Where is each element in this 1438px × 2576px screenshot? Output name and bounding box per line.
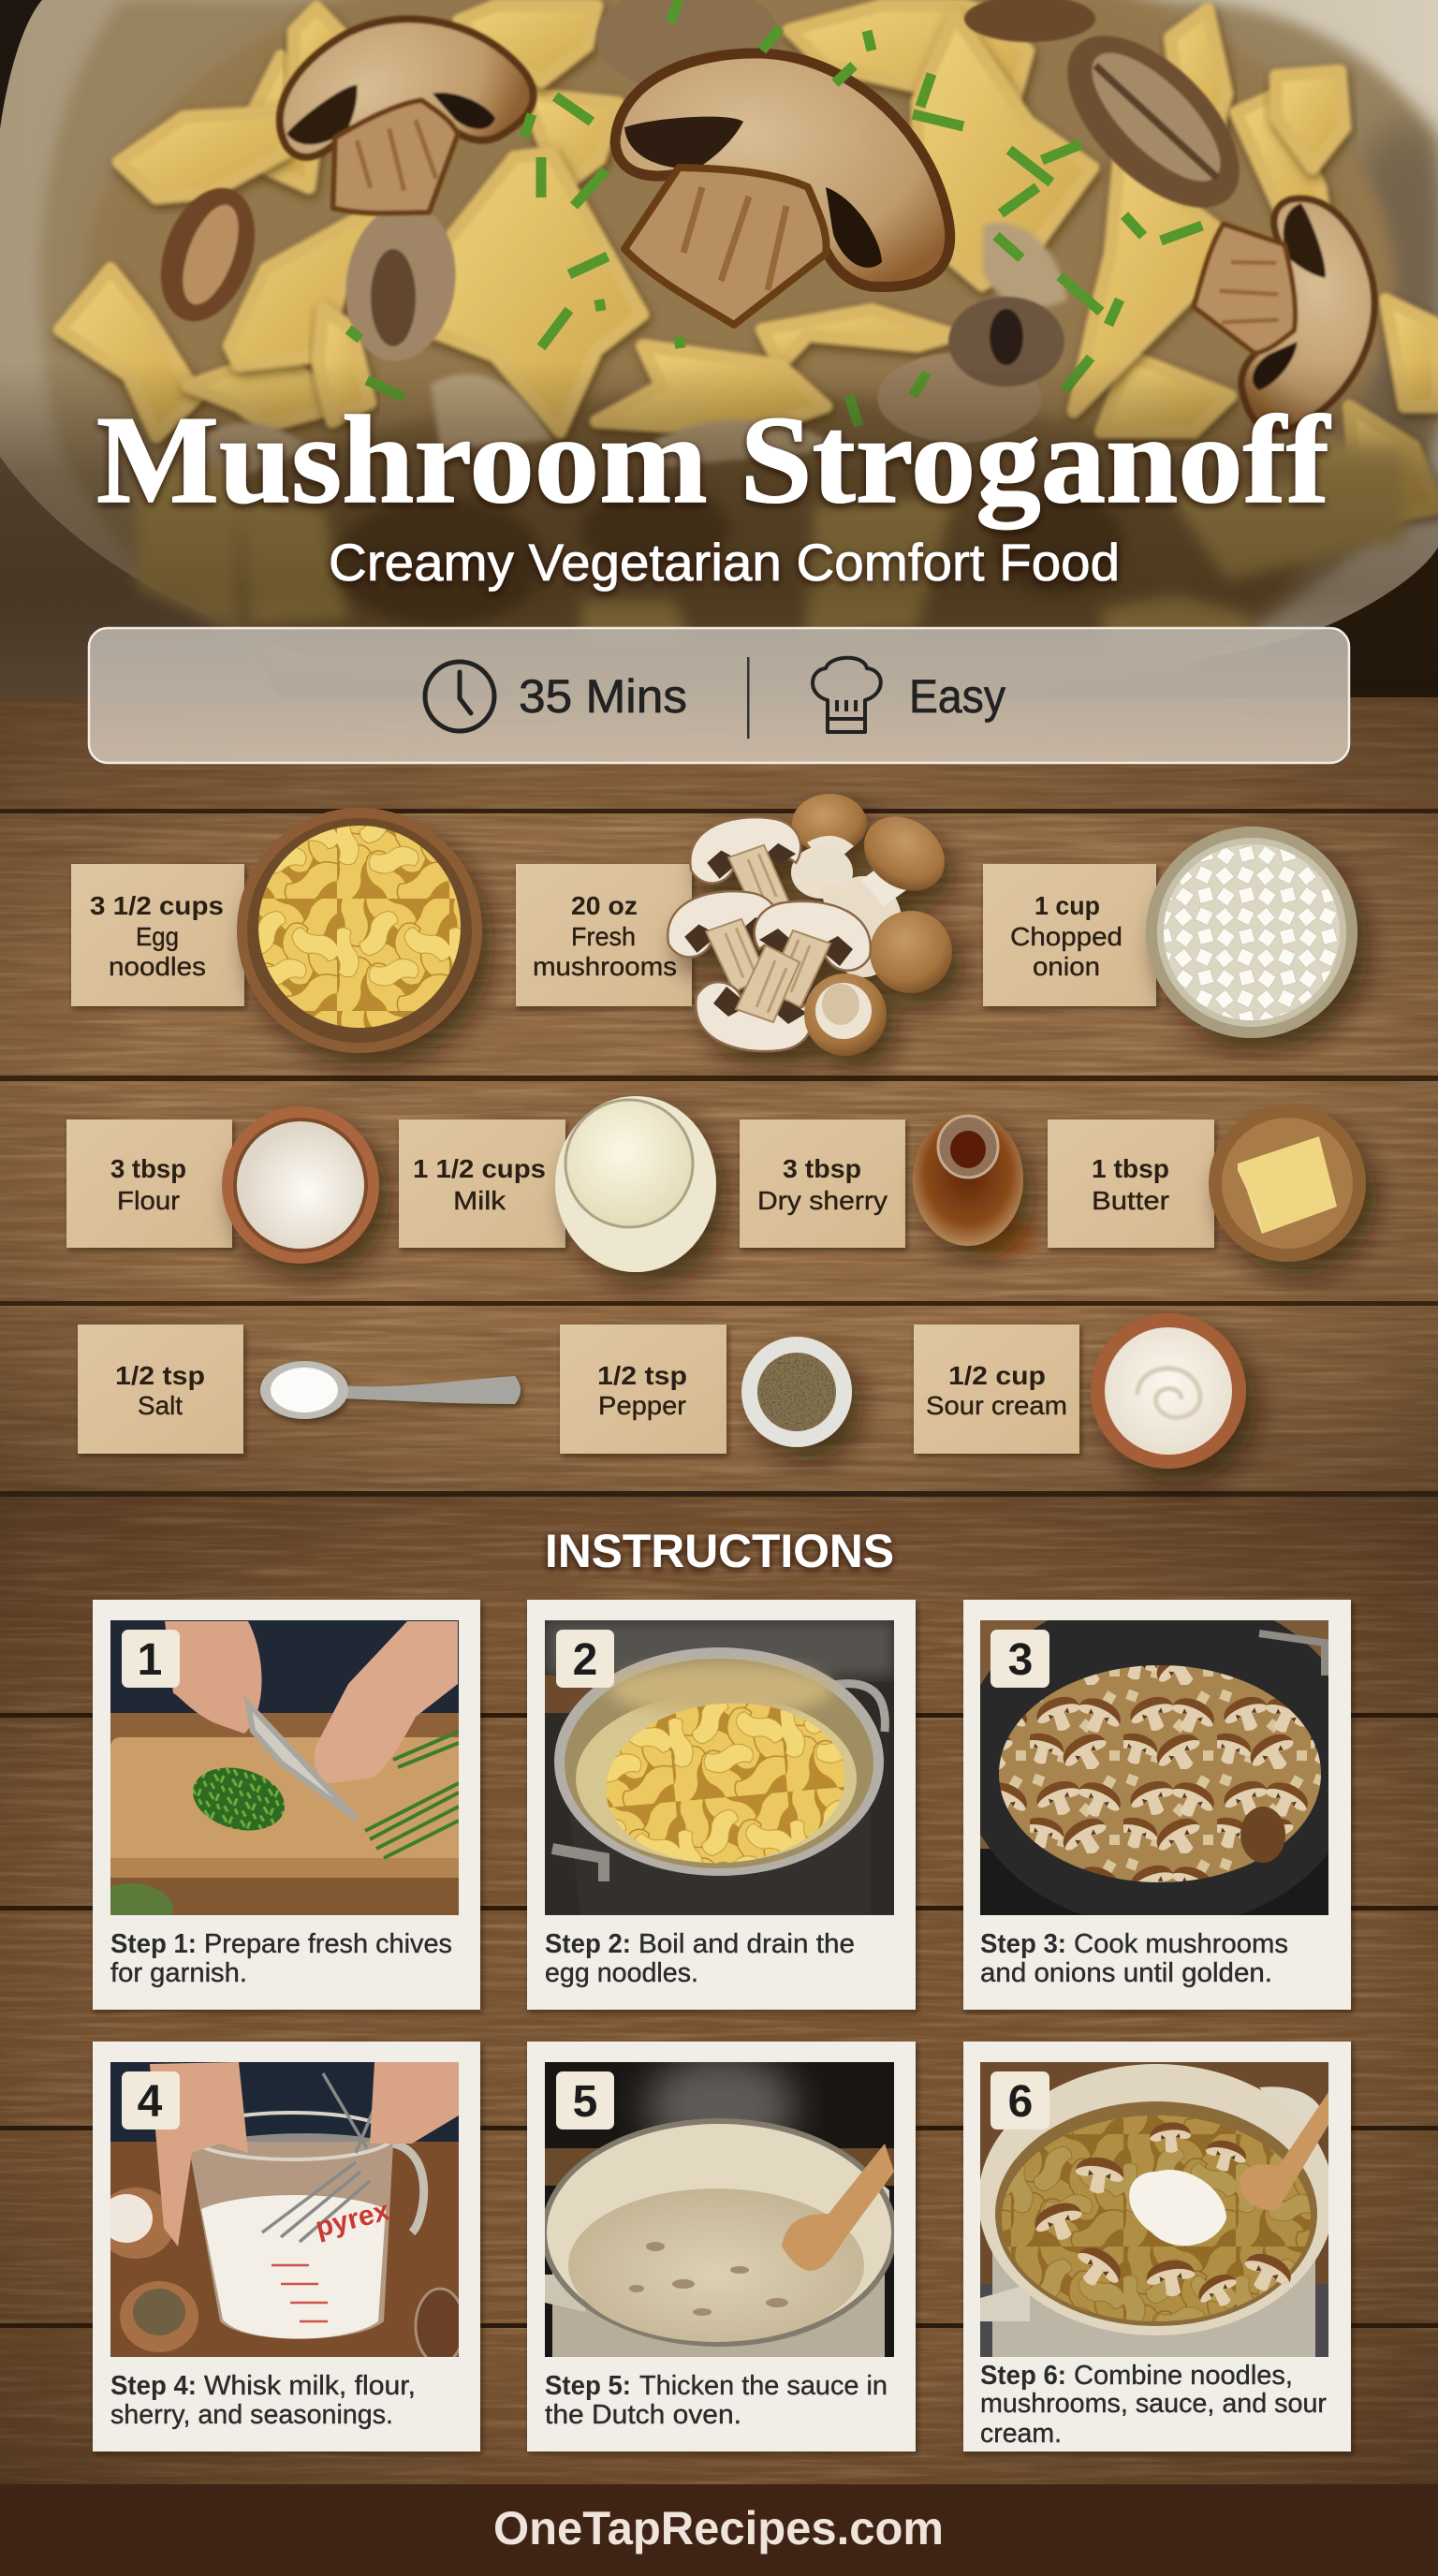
icon: milk jar: [555, 1096, 716, 1272]
ingredient: dry sherry: Dry sherry: [757, 1186, 888, 1215]
ingredient: pepper: [560, 1325, 852, 1454]
step 5 card: [527, 2042, 916, 2452]
step 3 text: and onions until golden.: [980, 1958, 1272, 1988]
icon: butter dish: [1209, 1105, 1366, 1262]
step 5 text: Thicken the sauce in: [639, 2371, 888, 2401]
ingredient: egg noodles: 3 1/2 cups: [90, 891, 224, 920]
ingredient: egg noodles: [71, 808, 482, 1053]
ingredient: salt: [78, 1325, 521, 1454]
hero sauce highlights: [197, 223, 1067, 487]
hero noodles: [60, 6, 1438, 522]
step 4 text: sherry, and seasonings.: [110, 2400, 393, 2430]
icon: sherry bottle: [913, 1113, 1034, 1256]
icon: chef hat: [813, 658, 881, 732]
badge 5: 5: [573, 2077, 597, 2127]
ingredient: chopped onion: 1 cup: [1034, 891, 1100, 920]
step 2 card: [527, 1600, 916, 2010]
ingredient: butter: 1 tbsp: [1092, 1154, 1169, 1183]
badge 6: [990, 2071, 1049, 2130]
ingredient: chopped onion: onion: [1033, 952, 1100, 981]
hero food photo: [0, 0, 1438, 711]
step 2 photo: [545, 1620, 894, 1915]
badge 4: 4: [138, 2077, 163, 2127]
badge 4: [122, 2071, 180, 2130]
step 6 text: mushrooms, sauce, and sour: [980, 2389, 1327, 2419]
step 3 card: [960, 1591, 1362, 2010]
ingredient: milk: [399, 1096, 716, 1272]
ingredient: fresh mushrooms: Fresh: [571, 922, 636, 951]
ingredient: sour cream: [914, 1313, 1246, 1469]
step 2 text: egg noodles.: [545, 1958, 698, 1988]
step 6 card: [963, 2042, 1351, 2452]
footer site name: OneTapRecipes.com: [493, 2502, 944, 2554]
step 6 text: Combine noodles,: [1074, 2361, 1293, 2391]
step 2 text: Step 2:: [545, 1929, 631, 1959]
divider: [747, 657, 749, 739]
step 2 text: Boil and drain the: [638, 1929, 855, 1959]
icon: clock: [425, 662, 494, 731]
time label: 35 Mins: [519, 670, 687, 723]
footer bar: [0, 2484, 1438, 2576]
step 1 text: for garnish.: [110, 1958, 247, 1988]
ingredient: dry sherry: 3 tbsp: [783, 1154, 861, 1183]
ingredient: flour: 3 tbsp: [110, 1154, 186, 1183]
ingredient: sour cream: 1/2 cup: [948, 1361, 1046, 1390]
hero chives: [348, 0, 1202, 426]
ingredient: sour cream: Sour cream: [926, 1391, 1067, 1420]
step 4 photo: [96, 2062, 464, 2364]
ingredient: fresh mushrooms: 20 oz: [571, 891, 638, 920]
badge 1: [122, 1630, 180, 1688]
wood background: ingredients: [0, 697, 1438, 1493]
ingredient: salt: Salt: [138, 1391, 183, 1420]
step 6 photo: [978, 2062, 1334, 2357]
icon: onion bowl: [1146, 827, 1357, 1038]
icon: sour cream bowl: [1091, 1313, 1246, 1469]
step 1 photo: [110, 1620, 459, 1915]
ingredient: egg noodles: noodles: [109, 952, 206, 981]
ingredient: flour: [66, 1106, 379, 1264]
ingredient: butter: Butter: [1092, 1186, 1169, 1215]
icon: pepper bowl: [741, 1337, 852, 1447]
difficulty label: Easy: [909, 670, 1005, 723]
ingredient: milk: Milk: [453, 1186, 506, 1215]
ingredient: fresh mushrooms: mushrooms: [533, 952, 677, 981]
icon: spoon of salt: [260, 1361, 521, 1419]
hero blurred lower noodles: [132, 437, 1411, 627]
wood background: instructions: [0, 1491, 1438, 2485]
ingredient: salt: 1/2 tsp: [115, 1361, 205, 1390]
step 1 text: Prepare fresh chives: [204, 1929, 452, 1959]
step 5 text: the Dutch oven.: [545, 2400, 741, 2430]
hero main mushroom: [615, 53, 950, 325]
subtitle: Creamy Vegetarian Comfort Food: [329, 533, 1120, 592]
ingredient: dry sherry: [740, 1113, 1034, 1256]
step 3 text: [980, 1929, 1288, 1988]
step 1 text: Step 1:: [110, 1929, 197, 1959]
title: Mushroom Stroganoff: [96, 390, 1330, 530]
step 3 text: Cook mushrooms: [1074, 1929, 1288, 1959]
badge 2: 2: [573, 1635, 597, 1685]
step 4 card: [93, 2042, 480, 2452]
badge 3: 3: [1008, 1635, 1033, 1685]
step 4 text: [110, 2371, 416, 2430]
ingredient: chopped onion: Chopped: [1010, 922, 1123, 951]
step 4 photo: pyrex: [313, 2195, 393, 2244]
step 1 card: [89, 1600, 480, 2010]
step 4 text: Whisk milk, flour,: [204, 2371, 416, 2401]
ingredient: fresh mushrooms: [516, 794, 959, 1056]
step 6 text: Step 6:: [980, 2361, 1066, 2391]
hero mushroom side pieces: [143, 0, 1403, 445]
step 5 photo: [541, 2055, 897, 2357]
ingredient: milk: 1 1/2 cups: [413, 1154, 546, 1183]
step 5 text: Step 5:: [545, 2371, 631, 2401]
icon: mushroom cluster: [668, 794, 959, 1056]
badge 6: 6: [1008, 2077, 1033, 2127]
instructions heading: INSTRUCTIONS: [545, 1525, 894, 1577]
step 2 text: [545, 1929, 855, 1988]
step 1 text: [110, 1929, 452, 1988]
step 4 text: Step 4:: [110, 2371, 197, 2401]
step 6 text: cream.: [980, 2419, 1062, 2449]
ingredient: butter: [1048, 1105, 1366, 1262]
badge 1: 1: [138, 1635, 162, 1685]
badge 5: [556, 2071, 614, 2130]
ingredient: flour: Flour: [117, 1186, 180, 1215]
icon: noodle bowl: [237, 808, 482, 1053]
ingredient: egg noodles: Egg: [136, 922, 179, 951]
step 5 text: [545, 2371, 888, 2430]
ingredient: chopped onion: [983, 827, 1357, 1038]
info panel: [89, 628, 1349, 763]
ingredient: pepper: 1/2 tsp: [597, 1361, 687, 1390]
step 3 photo: [960, 1591, 1362, 1928]
icon: flour bowl: [222, 1106, 379, 1264]
step 6 text: [980, 2361, 1327, 2449]
badge 2: [556, 1630, 614, 1688]
badge 3: [990, 1630, 1049, 1688]
ingredient: pepper: Pepper: [598, 1391, 686, 1420]
step 3 text: Step 3:: [980, 1929, 1066, 1959]
hero dark mushrooms blurred: [337, 487, 1123, 627]
